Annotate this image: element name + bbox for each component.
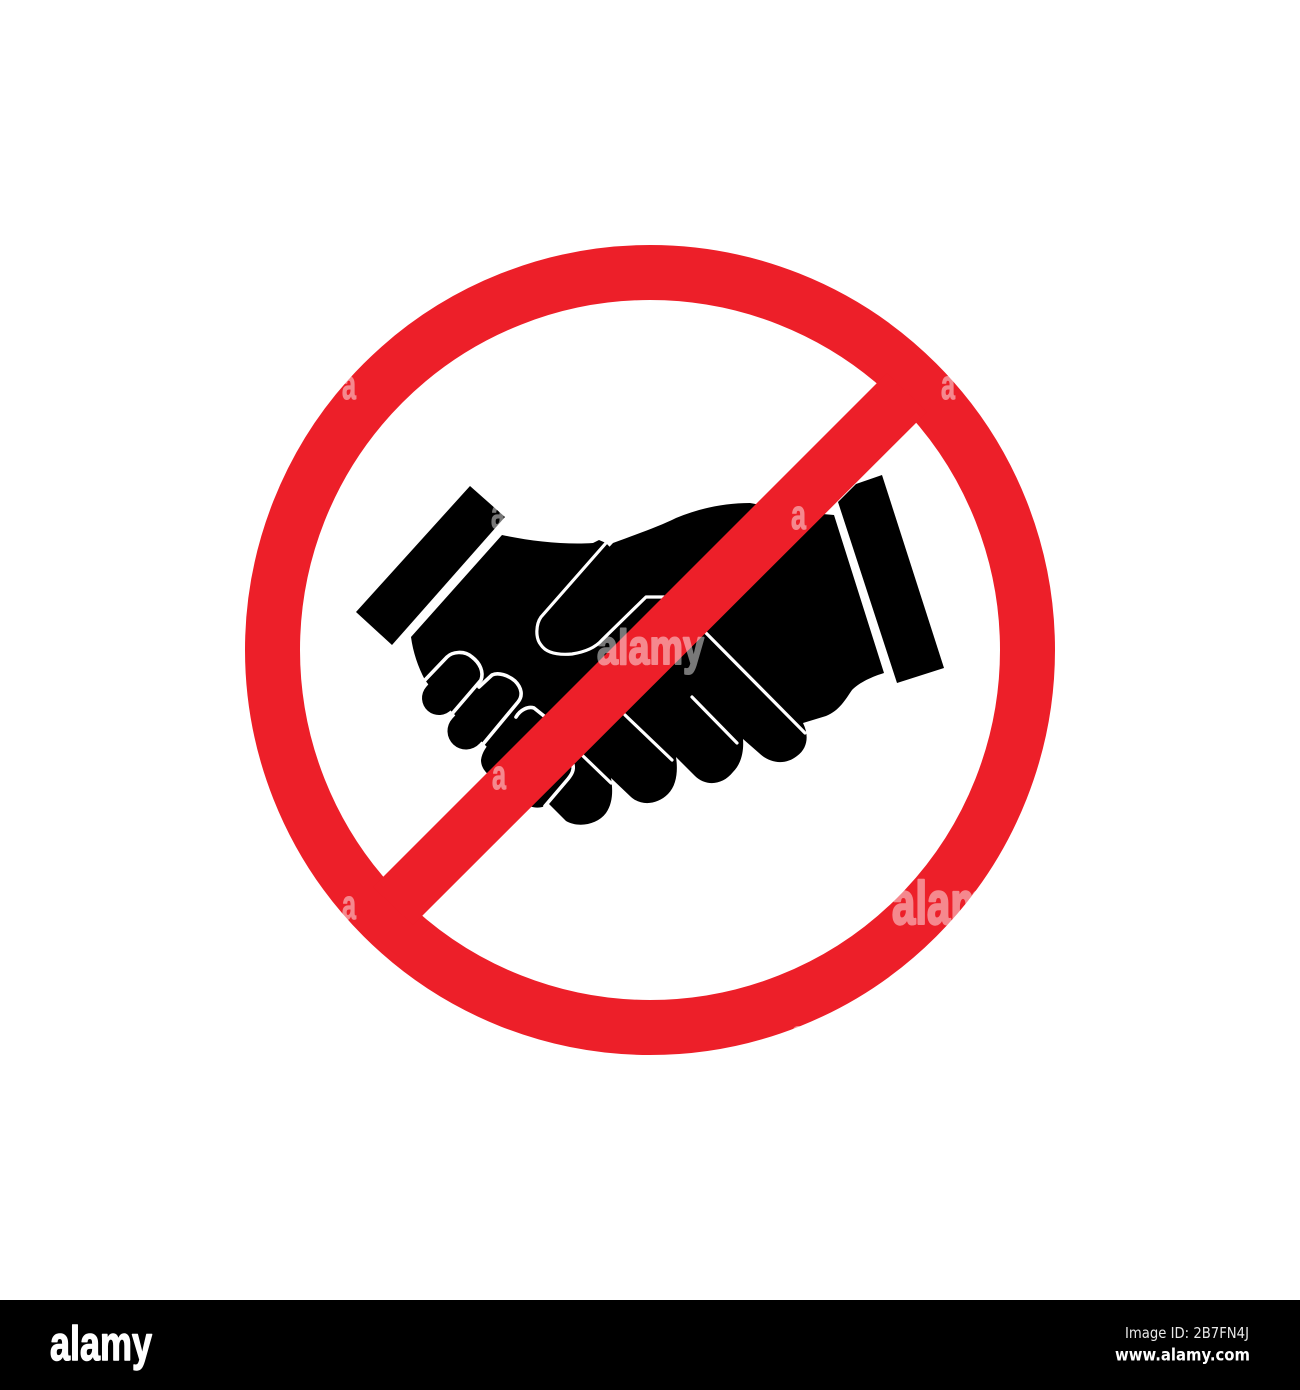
right hand with fingers [500,503,884,825]
left hand finger three [481,709,575,808]
watermark: lower right: alamy [892,870,1011,937]
thumb outline [537,543,664,654]
footer bar [0,1300,1300,1390]
prohibition sign: red diagonal slash [373,373,927,925]
watermark: small repeating letters: a [791,1011,805,1058]
watermark: small repeating letters: a [491,490,505,537]
left shirt cuff [356,486,505,645]
left hand finger two [466,692,502,731]
watermark: central: alamy [597,621,704,675]
website: www.alamy.com [1115,1346,1250,1364]
watermark: small repeating letters: a [342,361,356,408]
watermark: small repeating letters [342,361,955,1058]
white detail lines of the hands [425,543,805,806]
icon: handshake [356,475,944,825]
watermark: small repeating letters: a [492,751,506,798]
left hand finger one [439,667,466,698]
footer logo: alamy [50,1318,152,1371]
right shirt cuff [838,475,944,683]
prohibition sign: red ring [272,272,1028,1028]
left finger outlines [425,652,482,715]
left hand palm [411,535,660,760]
right finger separators [706,633,805,733]
image id: Image ID: 2B7FN4J [1125,1324,1249,1342]
watermark: small repeating letters: a [791,491,806,538]
watermark: small repeating letters: a [941,361,955,408]
watermark: small repeating letters: a [342,881,356,928]
